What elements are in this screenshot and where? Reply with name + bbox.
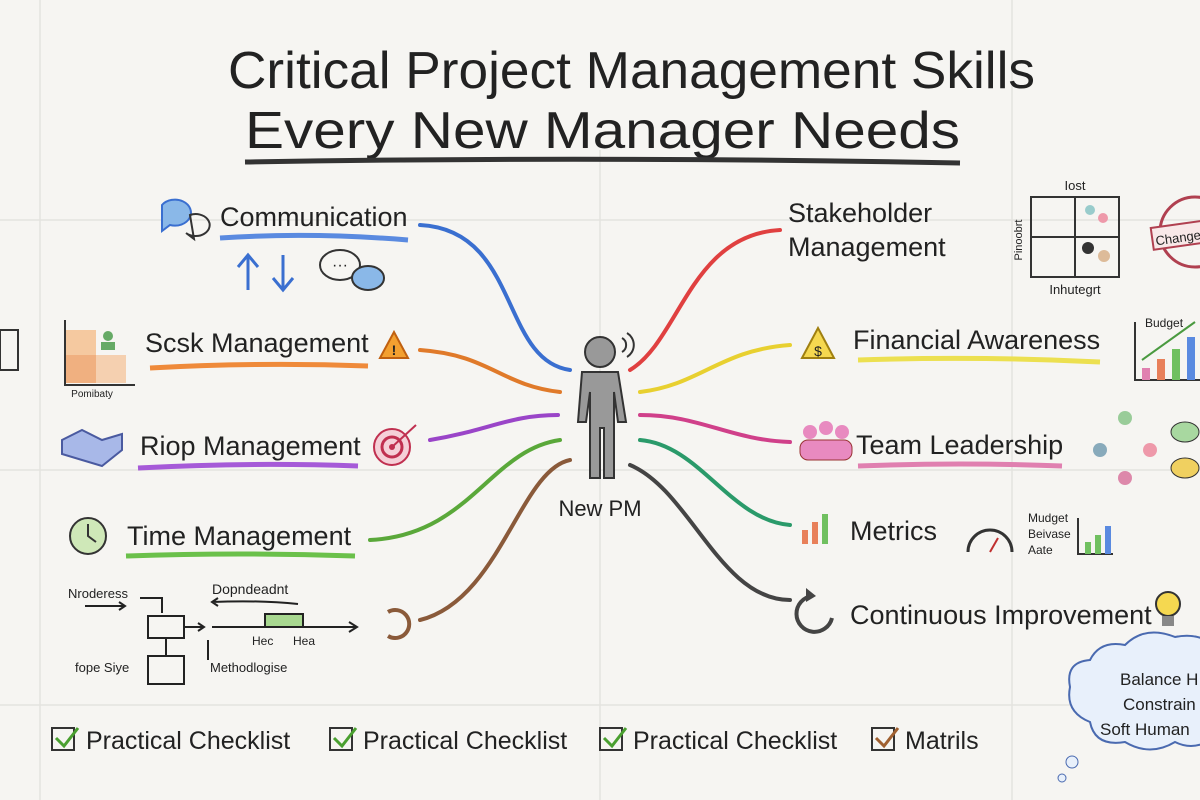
title: Every New Manager Needs: [245, 102, 960, 160]
left skill: Time Management: Time Management: [127, 521, 352, 551]
left skill: Communication: Communication: [220, 202, 408, 232]
checklist footer: Practical Checklist: [363, 727, 567, 755]
callout cloud: Balance H: [1120, 670, 1198, 689]
right skill: Financial Awareness: Budget: [1145, 316, 1184, 330]
right skill: Stakeholder Management: Iost: [1065, 178, 1086, 193]
left skill: Riop Management: [62, 425, 416, 468]
checklist footer: Practical Checklist: [633, 727, 837, 755]
right skill: Metrics: [802, 511, 1113, 557]
center figure: New PM: New PM: [558, 496, 642, 521]
left diagram: dependencies timeline: Dopndeadnt: [212, 581, 288, 597]
right skill: Metrics: Metrics: [850, 516, 937, 546]
right skill: Financial Awareness: $: [814, 343, 822, 359]
right skill: Continuous Improvement: Continuous Improvement: [850, 600, 1152, 630]
checklist footer: Practical Checklist: [86, 727, 290, 755]
left skill: Scsk Management: !: [392, 342, 396, 358]
callout cloud: Soft Human: [1100, 720, 1190, 739]
callout cloud: Constrain: [1123, 695, 1196, 714]
right skill: Stakeholder Management: Pinoobrt: [1013, 220, 1025, 260]
right skill: Stakeholder Management: Inhutegrt: [1049, 282, 1101, 297]
left skill: Scsk Management: [0, 320, 408, 400]
right skill: Team Leadership: Team Leadership: [856, 430, 1063, 460]
checklist footer: [52, 727, 979, 755]
left skill: Time Management: [70, 518, 355, 556]
callout cloud: [1058, 632, 1200, 782]
center figure: New PM: [558, 333, 642, 521]
connector curves: [370, 225, 790, 620]
right skill: Continuous Improvement: [796, 588, 1180, 632]
right skill: Metrics: Mudget: [1028, 511, 1069, 525]
right skill: Team Leadership: [800, 411, 1199, 485]
left diagram: dependencies timeline: [68, 581, 409, 684]
left skill: Communication: ···: [332, 257, 348, 274]
right skill: Financial Awareness: [802, 316, 1200, 380]
left skill: Scsk Management: Scsk Management: [145, 328, 369, 358]
left diagram: dependencies timeline: Nroderess: [68, 586, 128, 601]
right skill: Metrics: Aate: [1028, 543, 1053, 557]
left skill: Scsk Management: Pomibaty: [71, 389, 113, 400]
checklist footer: Matrils: [905, 727, 979, 755]
left skill: Riop Management: Riop Management: [140, 431, 361, 461]
right skill: Financial Awareness: Financial Awareness: [853, 325, 1100, 355]
right skill: Stakeholder Management: Stakeholder: [788, 198, 932, 228]
right skill: Metrics: Beivase: [1028, 527, 1071, 541]
left diagram: dependencies timeline: Methodlogise: [210, 660, 287, 675]
right skill: Stakeholder Management: Management: [788, 232, 946, 262]
left diagram: dependencies timeline: Hec: [252, 634, 273, 648]
left diagram: dependencies timeline: fope Siye: [75, 660, 129, 675]
title: Critical Project Management Skills: [228, 42, 1035, 100]
right skill: Stakeholder Management: [788, 178, 1200, 297]
left diagram: dependencies timeline: Hea: [293, 634, 315, 648]
title: [228, 42, 1035, 163]
left skill: Communication: [162, 200, 408, 290]
